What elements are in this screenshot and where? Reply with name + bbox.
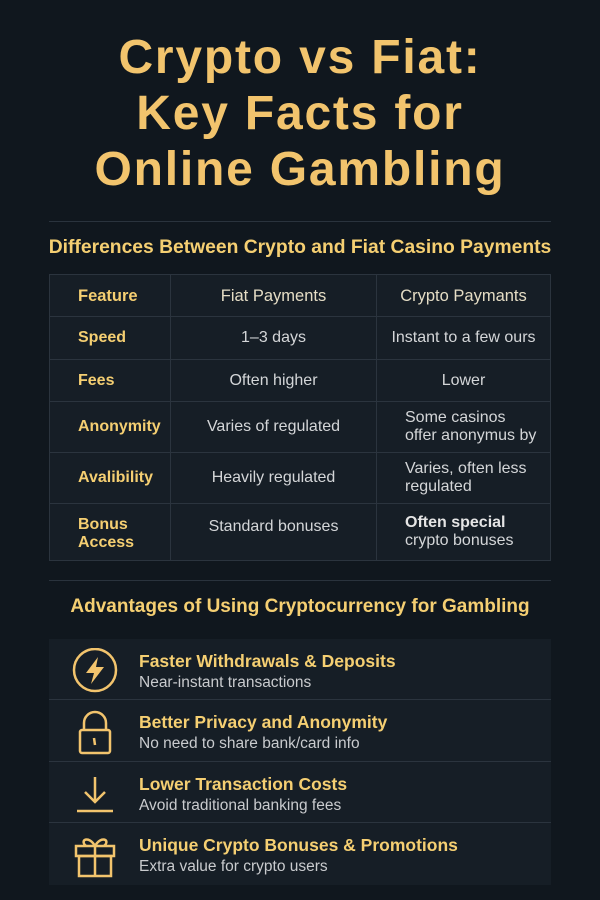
comparison table: Avalibility [78, 469, 153, 486]
comparison table: regulated [405, 478, 472, 495]
comparison table: Varies of regulated [207, 418, 340, 435]
comparison table: crypto bonuses [405, 532, 514, 549]
comparison table: Anonymity [78, 418, 161, 435]
comparison table: offer anonymus by [405, 427, 536, 444]
benefit: faster [49, 639, 551, 700]
comparison table: Often special [405, 514, 505, 531]
icon: lightning [72, 648, 118, 692]
benefit: costs: Avoid traditional banking fees [139, 797, 341, 814]
comparison table: Standard bonuses [209, 518, 338, 535]
benefit: costs: Lower Transaction Costs [139, 774, 347, 794]
benefit: bonuses [49, 823, 551, 885]
title: Crypto vs Fiat: [118, 31, 482, 84]
icon: download [77, 777, 113, 812]
comparison table: Access [78, 534, 134, 551]
comparison table: Bonus [78, 516, 128, 533]
comparison table: 1–3 days [241, 329, 306, 346]
icon: lock [78, 710, 112, 754]
benefit: bonuses: Extra value for crypto users [139, 858, 328, 875]
comparison table: Feature [78, 286, 138, 304]
comparison table: Lower [442, 372, 485, 388]
benefit: privacy: Better Privacy and Anonymity [139, 712, 387, 732]
comparison table [49, 274, 551, 561]
comparison table: Often higher [229, 372, 318, 388]
comparison table: Fees [78, 372, 114, 388]
title [94, 31, 506, 196]
heading: differences: Differences Between Crypto and Fiat Casino Payments [49, 237, 551, 258]
benefit: privacy: No need to share bank/card info [139, 735, 360, 752]
comparison table: Fiat Payments [221, 286, 326, 304]
title: Online Gambling [94, 143, 506, 196]
benefit: bonuses: Unique Crypto Bonuses & Promotions [139, 835, 458, 855]
comparison table: Instant to a few ours [391, 329, 536, 346]
benefit: costs [49, 762, 551, 823]
benefit: faster: Faster Withdrawals & Deposits [139, 651, 396, 671]
title: Key Facts for [136, 87, 464, 140]
benefit: privacy [49, 700, 551, 762]
icon: gift [74, 838, 116, 878]
comparison table: Crypto Paymants [400, 286, 527, 304]
benefit: faster: Near-instant transactions [139, 674, 311, 691]
comparison table: Varies, often less [405, 460, 527, 477]
comparison table: Some casinos [405, 409, 506, 426]
comparison table: Heavily regulated [212, 469, 335, 486]
comparison table: Speed [78, 329, 126, 346]
heading: advantages: Advantages of Using Cryptocurrency for Gambling [70, 596, 530, 617]
